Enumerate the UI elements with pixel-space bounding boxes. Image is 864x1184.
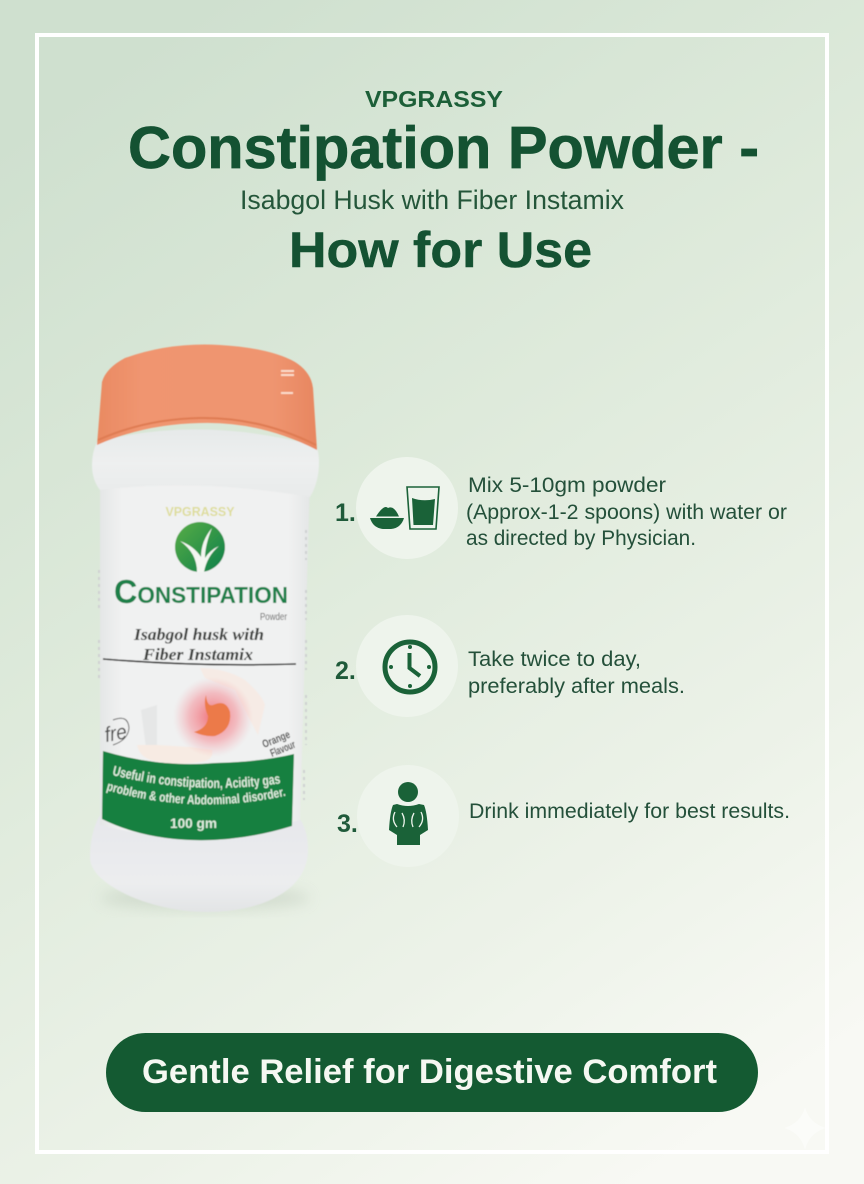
label brand: VPGRASSY <box>166 505 235 519</box>
sparkle watermark <box>784 1107 826 1150</box>
step 1 <box>335 457 787 559</box>
icon: bowl and glass of water <box>370 487 439 529</box>
label illustration <box>137 668 265 764</box>
heading: how for use: How for Use <box>289 222 592 278</box>
step 2 circle <box>356 615 458 717</box>
step 3 <box>337 765 790 867</box>
band text: problem & other Abdominal disorder. <box>105 782 286 806</box>
step 1 number: 1. <box>335 499 356 527</box>
orange flavour: Orange <box>261 729 292 751</box>
step 3 number: 3. <box>337 810 358 838</box>
label description <box>133 625 264 664</box>
step 1 text <box>466 473 787 550</box>
label description: Isabgol husk with <box>133 625 264 644</box>
band text <box>105 765 286 832</box>
icon: person drinking <box>389 782 428 845</box>
icon: clock <box>385 642 435 692</box>
step 2 text: preferably after meals. <box>468 674 685 698</box>
banner pill <box>106 1033 758 1112</box>
band text: Useful in constipation, Acidity gas <box>112 765 281 791</box>
orange flavour: Flavour <box>269 739 298 760</box>
label product name: Constipation <box>114 573 288 610</box>
step 3 circle <box>357 765 459 867</box>
label description: Fiber Instamix <box>142 645 253 664</box>
step 1 text: (Approx-1-2 spoons) with water or <box>466 500 787 524</box>
bottle cap <box>97 345 317 450</box>
step 2 text: Take twice to day, <box>468 647 641 671</box>
banner <box>106 1033 758 1112</box>
bottle shoulder <box>92 429 319 497</box>
free badge: fre <box>103 720 129 747</box>
step 2 number: 2. <box>335 657 356 685</box>
cap highlights <box>281 371 294 393</box>
label powder: Powder <box>260 611 287 623</box>
product bottle <box>90 344 319 912</box>
title: Constipation Powder - <box>128 115 759 181</box>
step 1 text: as directed by Physician. <box>466 526 696 550</box>
green label band <box>102 751 294 840</box>
bottle base <box>90 815 308 912</box>
step 1 circle <box>356 457 458 559</box>
band text: 100 gm <box>170 816 217 831</box>
orange flavour <box>261 729 298 760</box>
side print <box>99 530 306 800</box>
label rule <box>103 659 296 665</box>
bottle shadow <box>100 886 310 910</box>
step 2 text <box>468 647 685 698</box>
label logo <box>175 522 225 572</box>
step 1 text: Mix 5-10gm powder <box>468 473 666 497</box>
step 2 <box>335 615 685 717</box>
banner text: Gentle Relief for Digestive Comfort <box>142 1053 717 1091</box>
subtitle: Isabgol Husk with Fiber Instamix <box>240 185 624 215</box>
step 3 text: Drink immediately for best results. <box>469 799 790 823</box>
cap rim <box>98 418 316 445</box>
brand name: VPGRASSY <box>365 86 503 112</box>
bottle body <box>100 480 310 836</box>
